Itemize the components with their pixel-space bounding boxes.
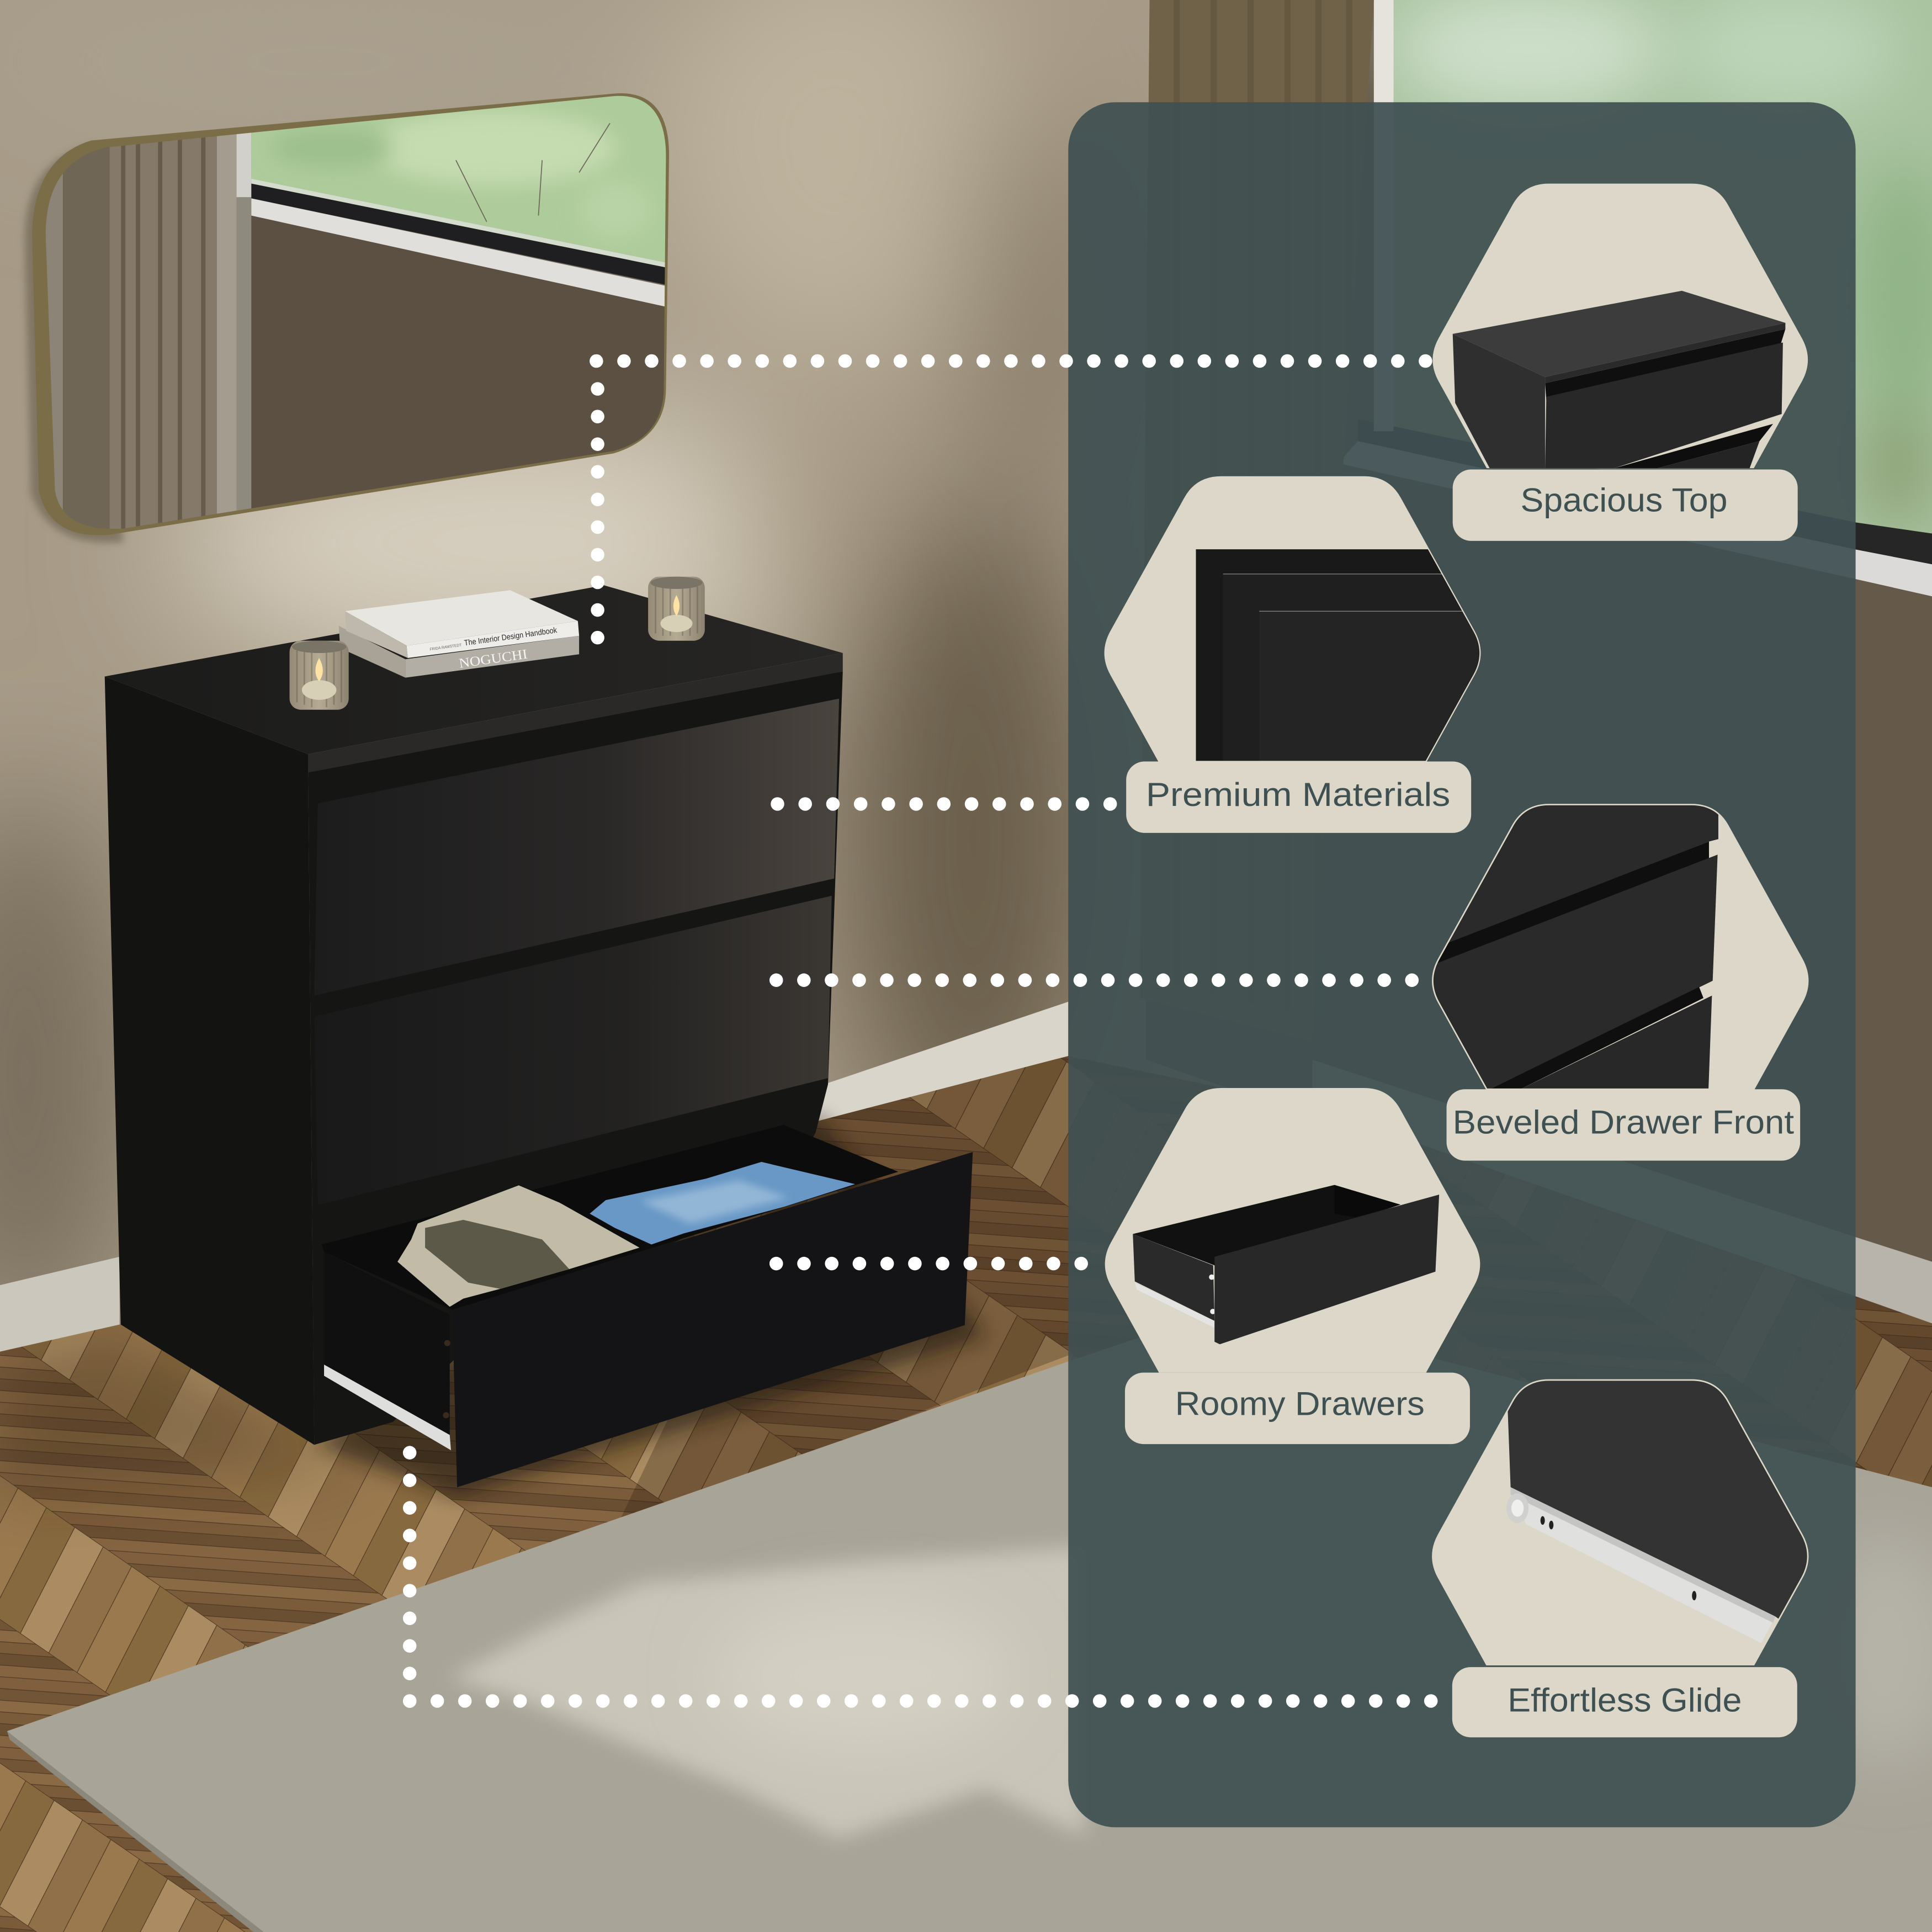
- candle holder left: [290, 641, 349, 710]
- detail image: drawer runner: [1506, 1355, 1824, 1651]
- label: [1125, 1373, 1470, 1444]
- label text: Effortless Glide: [1508, 1681, 1742, 1718]
- clothes: jeans: [590, 1162, 855, 1244]
- spine title: handbook: The Interior Design Handbook: [464, 626, 558, 648]
- dotted connector: premium materials: [777, 801, 1111, 807]
- top surface: [105, 585, 843, 754]
- label text: Beveled Drawer Front: [1453, 1103, 1794, 1141]
- dotted connector: spacious top: [596, 361, 1428, 638]
- label text: Roomy Drawers: [1175, 1385, 1425, 1423]
- candle holder right: [648, 577, 705, 641]
- lower book: [339, 626, 405, 678]
- hexagon: [1432, 184, 1808, 468]
- hexagon: [1105, 1088, 1480, 1373]
- hexagon outline: [1432, 1380, 1808, 1665]
- dotted connector: roomy drawers: [776, 1261, 1082, 1267]
- feature: spacious top: [1432, 184, 1808, 541]
- stacked books: [339, 590, 579, 678]
- top drawer: [314, 699, 839, 996]
- rug worn patch: [450, 1546, 1084, 1838]
- feature: beveled drawer front: [1417, 789, 1808, 1161]
- label: [1452, 1667, 1797, 1737]
- detail image: layered panels: [1196, 549, 1494, 761]
- label: [1453, 469, 1798, 541]
- top front edge: [308, 653, 843, 773]
- label: [1126, 761, 1471, 833]
- label: [1447, 1089, 1800, 1161]
- wall mirror with gold frame: [25, 86, 678, 543]
- translucent feature panel: [1068, 102, 1856, 1827]
- spine title: noguchi: NOGUCHI: [458, 647, 528, 671]
- side panel: [105, 676, 314, 1445]
- chest of drawers: [105, 585, 986, 1497]
- background: baseboards: [0, 1002, 1932, 1352]
- mirror shadow: [25, 145, 123, 543]
- hexagon outline: [1432, 805, 1808, 1089]
- floor shadow: [314, 1115, 986, 1497]
- label text: Premium Materials: [1146, 776, 1450, 813]
- background: wood floor: [0, 1056, 1932, 1932]
- detail image: empty drawer: [1133, 1185, 1439, 1344]
- background: right wall, window and curtain: [1140, 0, 1932, 1355]
- frame: [32, 93, 669, 535]
- detail image: dresser top: [1453, 291, 1785, 468]
- feature: effortless glide: [1432, 1355, 1824, 1737]
- screws: [444, 1340, 450, 1346]
- hexagon: [1432, 805, 1808, 1089]
- clothes: olive knit: [425, 1220, 569, 1289]
- body behind drawers: [308, 672, 843, 1445]
- open drawer side: [324, 1252, 450, 1437]
- upper book: [345, 590, 578, 646]
- hexagon: [1432, 1380, 1808, 1665]
- open drawer interior: [322, 1125, 898, 1310]
- detail image: drawer grooves: [1417, 789, 1718, 1089]
- dotted connector: effortless glide: [410, 1453, 1432, 1702]
- hexagon outline: [1105, 477, 1480, 761]
- feature: premium materials: [1105, 477, 1494, 833]
- background: rug: [7, 1306, 1932, 1932]
- spine author: FRIDA RAMSTEDT: [429, 643, 462, 652]
- dotted connector: beveled drawer front: [776, 977, 1413, 983]
- drawer rail: [324, 1365, 451, 1450]
- clothes: folded beige: [397, 1185, 639, 1307]
- open drawer front: [452, 1152, 973, 1487]
- middle drawer: [314, 896, 832, 1205]
- label text: Spacious Top: [1520, 481, 1727, 518]
- hexagon: [1105, 477, 1480, 761]
- feature: roomy drawers: [1105, 1088, 1480, 1444]
